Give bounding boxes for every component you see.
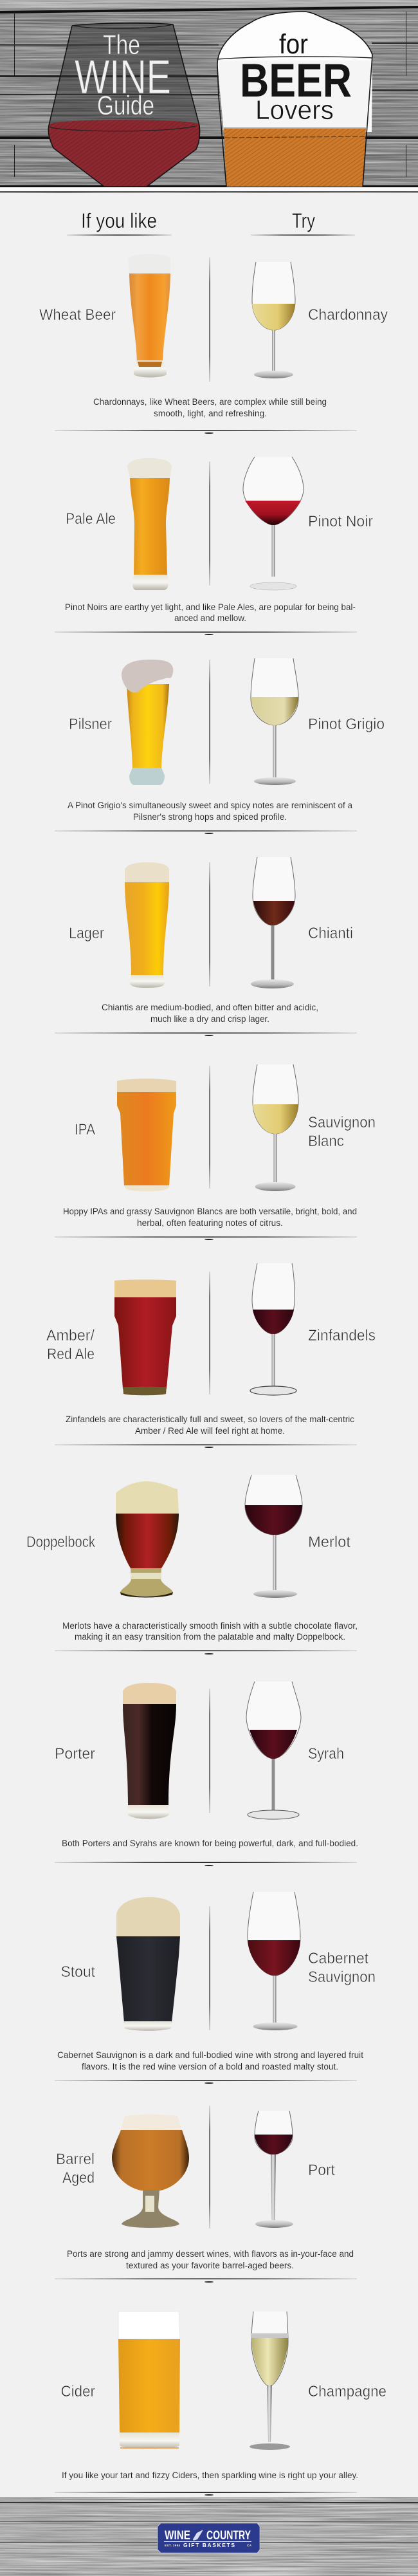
text: Cabernet caption: Cabernet Sauvignon is a dark and full-bodied wine with strong and layered fruit <box>57 2050 363 2060</box>
icon: merlot glass <box>245 1475 302 1598</box>
text: Sauvignon Blanc caption: herbal, often featuring notes of citrus. <box>137 1218 283 1228</box>
text: Zinfandels caption: Zinfandels are characteristically full and sweet, so lovers of the malt-centric <box>66 1414 354 1424</box>
panel: Barrel Aged and Port <box>56 2106 354 2270</box>
icon: IPA glass <box>117 1079 176 1191</box>
icon: pilsner glass <box>122 660 173 785</box>
label: Amber / Red Ale: Amber/ <box>46 1327 95 1344</box>
text: Merlot caption: Merlots have a characteristically smooth finish with a subtle chocolate flavor, <box>62 1621 358 1631</box>
text: Chianti caption: much like a dry and crisp lager. <box>150 1014 269 1024</box>
title: The: The <box>103 30 140 60</box>
text: Pinot Noir caption: Pinot Noirs are earthy yet light, and like Pale Ales, are popular for being bal- <box>65 602 356 612</box>
panel: header wood banner <box>0 0 418 192</box>
text: Port caption: Ports are strong and jammy dessert wines, with flavors as in-your-face and <box>67 2249 354 2259</box>
label: Porter: Porter <box>55 1745 95 1763</box>
text: Sauvignon Blanc caption <box>63 1207 357 1228</box>
title: Lovers: Lovers <box>255 95 334 125</box>
panel: IPA and Sauvignon Blanc <box>63 1064 376 1228</box>
label: Syrah: Syrah <box>308 1745 344 1763</box>
label: Cabernet Sauvignon <box>308 1950 376 1986</box>
icon: chardonnay glass <box>252 262 295 378</box>
label: Amber / Red Ale <box>46 1327 95 1363</box>
icon: sketched wine glass <box>48 23 200 187</box>
text: Port caption: textured as your favorite barrel-aged beers. <box>126 2261 294 2270</box>
icon: pinot grigio glass <box>251 658 298 785</box>
heading: Try: Try <box>292 209 315 232</box>
heading: If you like: If you like <box>81 209 157 232</box>
label: Zinfandels: Zinfandels <box>308 1327 376 1344</box>
label: Pilsner: Pilsner <box>69 716 112 733</box>
text: Sauvignon Blanc caption: Hoppy IPAs and grassy Sauvignon Blancs are both versatile, bright, bold, and <box>63 1207 357 1216</box>
icon: champagne flute <box>250 2312 290 2450</box>
text: Chardonnay caption <box>93 397 327 418</box>
label: Amber / Red Ale: Red Ale <box>47 1346 95 1363</box>
label: Sauvignon Blanc <box>308 1114 376 1150</box>
text: Pinot Noir caption: anced and mellow. <box>174 613 246 623</box>
icon: chianti glass <box>251 857 295 988</box>
icon: doppelbock glass <box>116 1481 179 1597</box>
title: WINE: WINE <box>75 50 171 104</box>
text: Zinfandels caption <box>66 1414 354 1436</box>
label: Merlot: Merlot <box>308 1534 350 1551</box>
icon: stout glass <box>116 1897 180 2031</box>
logo: Wine Country Gift Baskets: WINE <box>165 2529 190 2543</box>
label: Cabernet Sauvignon: Cabernet <box>308 1950 368 1967</box>
icon: zinfandel glass <box>250 1263 296 1395</box>
label: Cabernet Sauvignon: Sauvignon <box>308 1969 376 1986</box>
text: Port caption <box>67 2249 354 2270</box>
icon: sauvignon blanc glass <box>253 1064 298 1191</box>
label: Chardonnay: Chardonnay <box>308 306 388 324</box>
panel: footer wood banner <box>0 2502 418 2576</box>
text: Cabernet caption: flavors. It is the red wine version of a bold and roasted malty stout. <box>82 2062 338 2071</box>
icon: sketched beer glass <box>217 12 372 187</box>
icon: pinot noir glass <box>243 457 304 590</box>
title: Guide: Guide <box>97 90 154 120</box>
icon: amber ale glass <box>114 1279 176 1395</box>
panel: Lager and Chianti <box>69 857 353 1024</box>
icon: barrel aged snifter <box>112 2115 189 2228</box>
icon: port glass <box>255 2111 293 2228</box>
text: Cabernet caption <box>57 2050 363 2071</box>
text: Chianti caption: Chiantis are medium-bodied, and often bitter and acidic, <box>102 1003 318 1012</box>
label: Pinot Noir: Pinot Noir <box>308 513 373 530</box>
text: Pinot Grigio caption: A Pinot Grigio's simultaneously sweet and spicy notes are reminiscent of a <box>68 801 353 810</box>
text: Chardonnay caption: smooth, light, and refreshing. <box>154 409 267 418</box>
label: Stout: Stout <box>60 1963 95 1981</box>
text: Merlot caption: making it an easy transition from the palatable and malty Doppelbock. <box>75 1632 345 1642</box>
label: Pale Ale: Pale Ale <box>66 510 116 528</box>
icon: porter glass <box>123 1683 176 1819</box>
text: Pinot Noir caption <box>65 602 356 623</box>
text: Merlot caption <box>62 1621 358 1642</box>
panel: Wheat Beer and Chardonnay <box>39 254 388 418</box>
icon: wheat beer glass <box>128 254 170 377</box>
label: Barrel Aged: Barrel <box>56 2151 95 2168</box>
label: IPA: IPA <box>75 1121 95 1138</box>
panel: Stout and Cabernet Sauvignon <box>57 1892 376 2071</box>
label: Pinot Grigio: Pinot Grigio <box>308 716 385 733</box>
logo: Wine Country Gift Baskets: CA <box>247 2544 252 2547</box>
title: for: for <box>279 29 308 60</box>
text: Champagne caption: If you like your tart and fizzy Ciders, then sparkling wine is right up your alley. <box>62 2470 358 2480</box>
panel: Amber Red Ale and Zinfandels <box>46 1263 376 1436</box>
label: Sauvignon Blanc: Blanc <box>308 1133 344 1150</box>
text: Chianti caption <box>102 1003 318 1024</box>
label: Doppelbock: Doppelbock <box>26 1534 96 1551</box>
icon: pale ale glass <box>127 458 172 590</box>
label: Lager: Lager <box>69 925 104 942</box>
icon: cabernet glass <box>248 1892 300 2030</box>
label: Barrel Aged <box>56 2151 95 2187</box>
panel: Pale Ale and Pinot Noir <box>65 457 373 623</box>
logo: Wine Country Gift Baskets: EST. 1984 <box>165 2544 180 2547</box>
text: Zinfandels caption: Amber / Red Ale will feel right at home. <box>135 1426 285 1436</box>
logo: Wine Country Gift Baskets: COUNTRY <box>206 2529 251 2543</box>
label: Champagne: Champagne <box>308 2383 386 2400</box>
panel: Pilsner and Pinot Grigio <box>68 658 385 822</box>
logo: Wine Country Gift Baskets <box>158 2523 260 2553</box>
panel: Doppelbock and Merlot <box>26 1475 358 1642</box>
icon: lager glass <box>125 862 169 988</box>
panel: Cider and Champagne <box>60 2312 386 2480</box>
label: Cider: Cider <box>60 2383 95 2400</box>
text: Syrah caption: Both Porters and Syrahs are known for being powerful, dark, and full-bodied. <box>62 1839 358 1848</box>
text: Pinot Grigio caption: Pilsner's strong hops and spiced profile. <box>133 812 287 822</box>
text: Pinot Grigio caption <box>68 801 353 822</box>
label: Port: Port <box>308 2162 335 2179</box>
label: Barrel Aged: Aged <box>62 2169 95 2187</box>
icon: syrah glass <box>246 1682 301 1819</box>
text: Chardonnay caption: Chardonnays, like Wheat Beers, are complex while still being <box>93 397 327 407</box>
label: Chianti: Chianti <box>308 925 353 942</box>
logo: Wine Country Gift Baskets: GIFT BASKETS <box>183 2542 235 2548</box>
title: BEER: BEER <box>240 55 352 107</box>
label: Sauvignon Blanc: Sauvignon <box>308 1114 376 1131</box>
icon: cider glass <box>118 2312 180 2449</box>
panel: Porter and Syrah <box>55 1682 358 1848</box>
label: Wheat Beer: Wheat Beer <box>39 306 116 324</box>
